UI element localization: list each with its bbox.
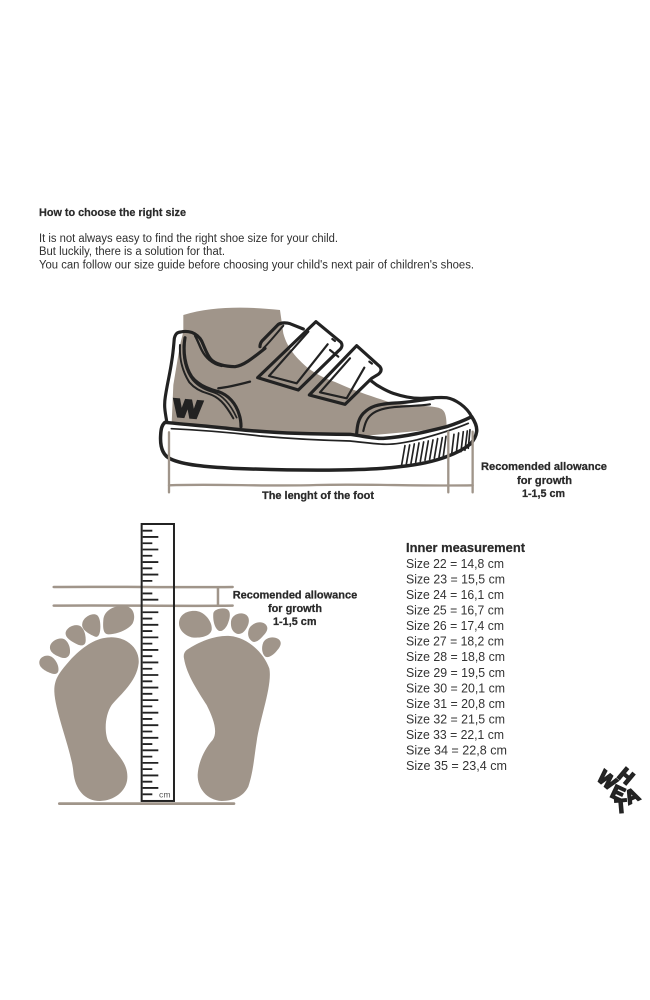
foot length and growth allowance lines bbox=[169, 432, 473, 492]
label: growth allowance for feet bbox=[233, 590, 357, 628]
foot silhouette inside shoe bbox=[172, 308, 447, 437]
heading: How to choose the right size bbox=[39, 207, 186, 219]
inner measurement heading: Inner measurement bbox=[406, 540, 526, 555]
ruler unit: cm bbox=[159, 790, 171, 800]
left foot bbox=[39, 606, 139, 801]
ruler bbox=[142, 524, 174, 801]
size table: Size 28 = 18,8 cm bbox=[406, 649, 505, 664]
vamp and toe cap bbox=[370, 380, 472, 417]
back strap bbox=[258, 322, 342, 390]
size table: Size 22 = 14,8 cm bbox=[406, 556, 504, 571]
WHEAT logo: H bbox=[613, 764, 637, 789]
label: growth allowance for shoe bbox=[481, 461, 607, 500]
label: growth allowance for shoe: Recomended allowance bbox=[481, 461, 607, 473]
size table bbox=[406, 556, 507, 773]
heel counter lines bbox=[184, 338, 241, 427]
WHEAT logo: W bbox=[593, 767, 620, 795]
collar line bbox=[218, 382, 250, 388]
size table: Size 27 = 18,2 cm bbox=[406, 634, 504, 648]
WHEAT logo: T bbox=[614, 796, 628, 818]
size table: Size 32 = 21,5 cm bbox=[406, 712, 505, 726]
size table: Size 26 = 17,4 cm bbox=[406, 618, 504, 633]
size table: Size 24 = 16,1 cm bbox=[406, 587, 504, 602]
label: growth allowance for feet: 1-1,5 cm bbox=[273, 616, 317, 628]
front strap bbox=[309, 346, 381, 404]
right foot bbox=[179, 608, 281, 801]
label: length of the foot: The lenght of the foot bbox=[262, 490, 374, 502]
intro text block: It is not always easy to find the right shoe size for your child. bbox=[39, 233, 338, 245]
intro text block: But luckily, there is a solution for that. bbox=[39, 246, 225, 258]
WHEAT logo: E bbox=[607, 782, 628, 806]
label: growth allowance for feet: Recomended allowance bbox=[233, 590, 357, 602]
growth allowance guide lines bbox=[54, 587, 234, 804]
shoe illustration bbox=[161, 308, 477, 492]
size table: Size 25 = 16,7 cm bbox=[406, 602, 504, 618]
size table: Size 29 = 19,5 cm bbox=[406, 665, 505, 680]
intro text block bbox=[39, 233, 474, 272]
feet and ruler diagram bbox=[39, 524, 281, 804]
size table: Size 30 = 20,1 cm bbox=[406, 680, 505, 696]
WHEAT logo bbox=[593, 764, 643, 818]
W logo on heel: W bbox=[172, 395, 204, 424]
size table: Size 34 = 22,8 cm bbox=[406, 742, 507, 758]
size table: Size 23 = 15,5 cm bbox=[406, 572, 505, 586]
size table: Size 33 = 22,1 cm bbox=[406, 727, 504, 742]
WHEAT logo: A bbox=[622, 784, 643, 809]
size table: Size 35 = 23,4 cm bbox=[406, 758, 507, 773]
label: growth allowance for shoe: 1-1,5 cm bbox=[522, 488, 565, 500]
label: growth allowance for feet: for growth bbox=[268, 603, 322, 615]
size table: Size 31 = 20,8 cm bbox=[406, 696, 505, 711]
intro text block: You can follow our size guide before choosing your child's next pair of children's shoes. bbox=[39, 260, 474, 272]
label: growth allowance for shoe: for growth bbox=[517, 475, 572, 487]
shoe upper outline bbox=[165, 331, 265, 421]
sole hatching bbox=[402, 430, 470, 465]
sole bbox=[161, 417, 477, 470]
